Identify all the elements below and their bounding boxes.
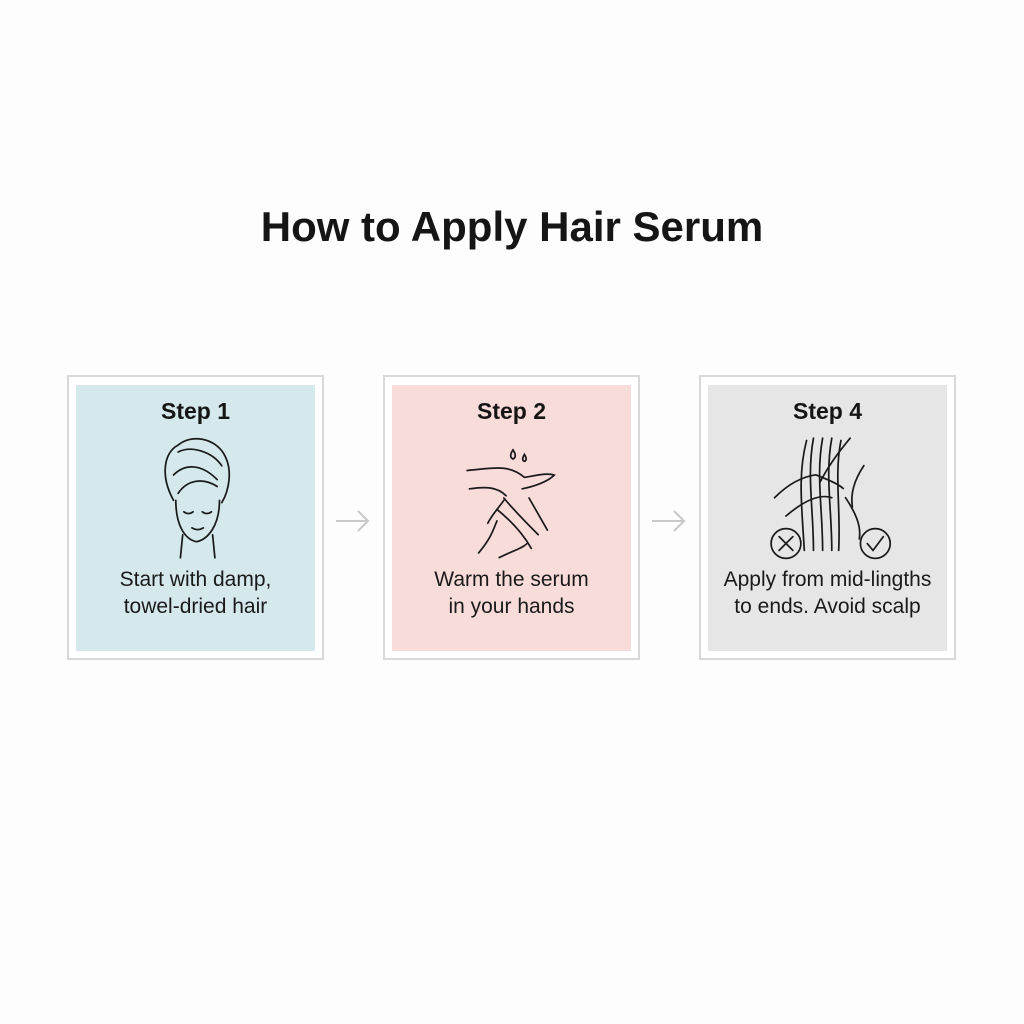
text: step 1: Start with damp,: [120, 568, 271, 591]
text: step 2: Warm the serum: [434, 568, 589, 591]
arrow 2: [652, 510, 686, 532]
heading: step 1: Step 1: [161, 398, 230, 424]
panel: step 1: [67, 375, 324, 660]
text: step 1: [120, 568, 271, 618]
text: step 1: towel-dried hair: [124, 595, 267, 618]
text: step 4: to ends. Avoid scalp: [734, 595, 921, 618]
icon: hands with drops: [466, 448, 556, 558]
heading: step 2: Step 2: [477, 398, 546, 424]
heading: step 4: Step 4: [793, 398, 862, 424]
text: step 4: Apply from mid-lingths: [724, 568, 931, 591]
panel: step 4: [699, 375, 956, 660]
text: step 4: [724, 568, 931, 618]
title: How to Apply Hair Serum: [261, 203, 763, 250]
icon: towel head: [164, 438, 230, 559]
arrow 1: [336, 510, 370, 532]
icon: hair and hands with cross/check: [770, 437, 892, 560]
panel: step 2: [383, 375, 640, 660]
text: step 2: in your hands: [448, 595, 575, 618]
text: step 2: [434, 568, 589, 618]
